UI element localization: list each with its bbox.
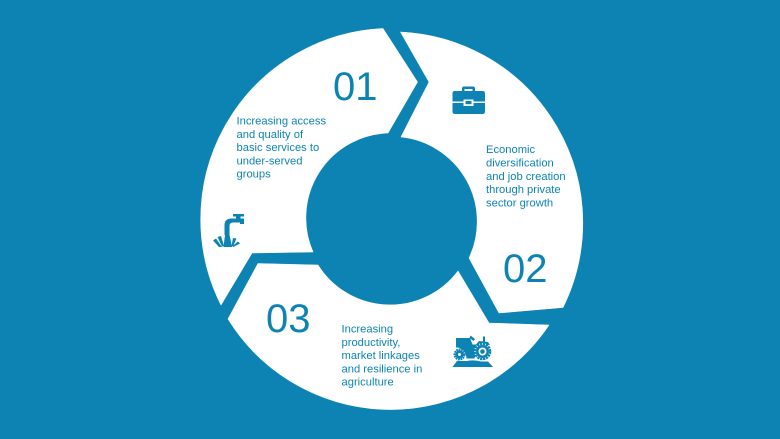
text: basic services: under-served [236,156,302,168]
text: economic diversification: and job creation [486,171,566,183]
number 03: 03 [266,297,310,341]
text: basic services: and quality of [236,129,304,141]
text: agriculture: and resilience in [342,364,422,376]
number 01: 01 [333,65,378,109]
text: basic services: basic services to [236,142,319,154]
panel: segment 01 [201,28,418,305]
icon: tractor [452,336,493,367]
text: basic services: groups [236,168,271,180]
number 02: 02 [503,247,548,291]
text: agriculture: market linkages [342,350,420,362]
text: agriculture: productivity, [342,337,400,349]
icon: water tap [213,214,244,247]
panel: segment 03 [228,264,549,410]
text: economic diversification: sector growth [486,198,553,210]
text: agriculture: agriculture [342,376,394,388]
text: basic services: Increasing access [236,116,326,128]
text: economic diversification: through private [486,184,561,196]
text: economic diversification: diversification [486,158,554,170]
text: agriculture: Increasing [342,324,393,336]
icon: briefcase [452,86,485,114]
panel: segment 02 [400,32,583,313]
text: economic diversification: Economic [486,144,536,156]
